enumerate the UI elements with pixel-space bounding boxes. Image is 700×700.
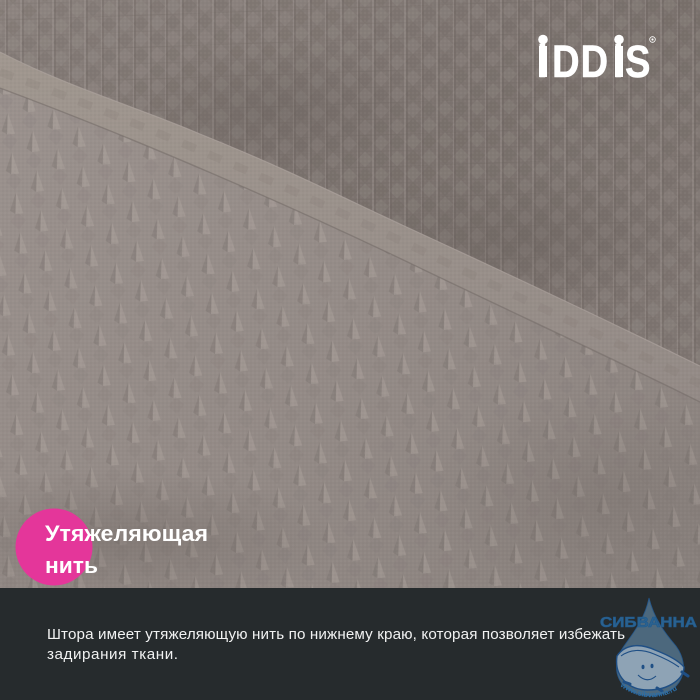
heading: нить	[45, 553, 98, 578]
registered mark	[650, 37, 655, 42]
watermark: Сибванна	[600, 598, 698, 698]
curtain hem fold	[0, 52, 700, 402]
icon: water drop	[616, 598, 684, 696]
lower fabric layer	[0, 88, 700, 610]
upper fabric layer	[0, 0, 700, 400]
heading: Утяжеляющая	[45, 521, 208, 546]
pink circle accent	[16, 508, 92, 586]
body text: Штора имеет утяжеляющую нить по нижнему краю, которая позволяет избежать	[47, 626, 625, 643]
icon: smiling bathtub	[617, 646, 688, 691]
dark footer band	[0, 588, 700, 700]
watermark url: www.sibvanna.ru	[620, 683, 677, 698]
body text	[47, 626, 625, 663]
heading	[45, 521, 208, 578]
logo: IDDIS: iDDiS	[537, 36, 651, 87]
body text: задирания ткани.	[47, 646, 178, 663]
watermark name: СИБВАННА	[600, 615, 698, 631]
